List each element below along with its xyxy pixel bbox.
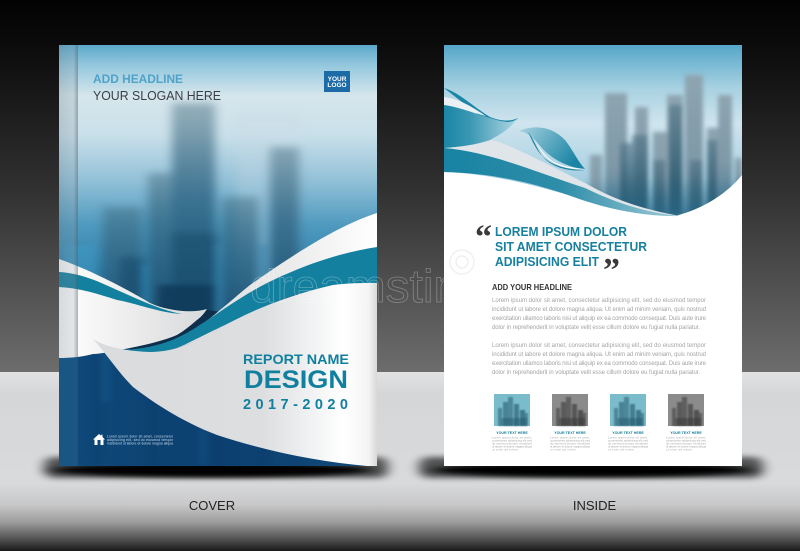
thumbnail 1: consectetur adipisicing elit sed — [492, 438, 532, 442]
report title: DESIGN — [244, 366, 348, 394]
paragraph 2: Lorem ipsum dolor sit amet, consectetur adipisicing elit, sed do eiusmod tempor — [492, 343, 706, 349]
paragraph 2 — [492, 343, 707, 376]
cover drop shadow — [44, 457, 388, 478]
panel: cover — [59, 45, 377, 466]
report title: 2017-2020 — [243, 397, 348, 413]
thumbnail 3: ut enim ad minim — [608, 448, 635, 452]
thumbnail 1 — [492, 394, 532, 452]
icon: house — [93, 434, 105, 445]
label: inside: INSIDE — [573, 498, 616, 513]
header skyline — [585, 75, 745, 223]
white wave, upper right — [122, 213, 377, 353]
thumbnail 2: ut labore et dolore magna aliqua — [550, 444, 590, 448]
header image — [444, 45, 745, 223]
cover sky background — [59, 45, 377, 312]
background floor — [0, 372, 800, 551]
headline: ADD YOUR HEADLINE — [492, 282, 572, 292]
paragraph 1: Lorem ipsum dolor sit amet, consectetur adipisicing elit, sed do eiusmod tempor — [492, 298, 706, 304]
paragraph 2: dolor in reprehenderit in voluptate velit esse cillum dolore eu fugiat nulla pariatur. — [492, 370, 700, 376]
background wall — [0, 0, 800, 373]
page background — [444, 45, 742, 466]
logo badge: LOGO — [327, 82, 347, 89]
pull quote: LOREM IPSUM DOLOR — [495, 225, 627, 239]
blurred city skyline — [103, 103, 300, 337]
thumbnail 1: YOUR TEXT HERE — [496, 431, 528, 435]
paragraph 1: incididunt ut labore et dolore magna aliqua. Ut enim ad minim veniam, quis nostrud — [492, 307, 706, 313]
quote marks: ” — [603, 252, 620, 289]
thumbnail 3: consectetur adipisicing elit sed — [608, 438, 648, 442]
thumbnail 4: consectetur adipisicing elit sed — [666, 438, 706, 442]
thumbnail 1: do eiusmod tempor incididunt — [492, 442, 532, 446]
paragraph 2: exercitation ullamco laboris nisi ut aliquip ex ea commodo consequat. Duis aute irure — [492, 361, 707, 367]
cover address text — [107, 434, 174, 446]
panel: inside page — [444, 45, 745, 466]
logo badge: YOUR — [328, 76, 347, 83]
teal wedge — [444, 105, 518, 148]
thumbnail 2: Lorem ipsum dolor sit amet, — [550, 436, 590, 440]
stock watermark: dreamstime — [250, 260, 500, 312]
cover address text: Lorem ipsum dolor sit amet, consectetur — [107, 434, 174, 438]
paragraph 1: dolor in reprehenderit in voluptate velit esse cillum dolore eu fugiat nulla pariatur. — [492, 325, 700, 331]
thumbnail 4: ut labore et dolore magna aliqua — [666, 444, 706, 448]
pull quote — [495, 225, 647, 269]
thumbnail 1: ut labore et dolore magna aliqua — [492, 444, 532, 448]
thumbnail 3: YOUR TEXT HERE — [612, 431, 644, 435]
spine over navy — [59, 358, 78, 466]
teal ribbon, right — [123, 247, 377, 353]
thumbnail 1: Lorem ipsum dolor sit amet, — [492, 436, 532, 440]
header sky — [444, 45, 742, 220]
pull quote: SIT AMET CONSECTETUR — [495, 240, 647, 254]
grey wave band — [444, 140, 680, 216]
paragraph 1 — [492, 298, 707, 331]
thumbnail 1: ut enim ad minim — [492, 448, 519, 452]
cover address text: adipisicing elit, sed do eiusmod tempor — [107, 438, 174, 442]
teal ribbon, left — [59, 272, 182, 314]
thumbnail 3: do eiusmod tempor incididunt — [608, 442, 648, 446]
pull quote: ADIPISICING ELIT — [495, 255, 599, 269]
leaf shape — [519, 127, 585, 170]
report title: REPORT NAME — [243, 351, 349, 367]
teal lower band — [444, 148, 680, 216]
dark sliver — [130, 310, 222, 350]
paragraph 2: incididunt ut labore et dolore magna aliqua. Ut enim ad minim veniam, quis nostrud — [492, 352, 706, 358]
slogan: YOUR SLOGAN HERE — [93, 88, 221, 103]
spine — [59, 45, 78, 466]
thumbnail 2: do eiusmod tempor incididunt — [550, 442, 590, 446]
white wave stripe — [444, 97, 486, 116]
thumbnail 4: do eiusmod tempor incididunt — [666, 442, 706, 446]
logo badge — [324, 71, 350, 92]
large white sweep — [93, 283, 377, 466]
quote marks: “ — [475, 219, 492, 256]
thumbnail 2 — [550, 394, 590, 452]
thumbnail 4 — [666, 394, 706, 452]
thumbnail 3: Lorem ipsum dolor sit amet, — [608, 436, 648, 440]
thumbnail 4: Lorem ipsum dolor sit amet, — [666, 436, 706, 440]
teal wave stripe — [444, 88, 518, 123]
thumbnail 2: consectetur adipisicing elit sed — [550, 438, 590, 442]
thumbnail 3 — [608, 394, 648, 452]
inside page drop shadow — [419, 457, 763, 478]
vertical light streaks — [66, 246, 268, 315]
navy panel stripes — [106, 356, 107, 398]
paragraph 1: exercitation ullamco laboris nisi ut aliquip ex ea commodo consequat. Duis aute irure — [492, 316, 707, 322]
report title — [244, 354, 348, 409]
thumbnail 3: ut labore et dolore magna aliqua — [608, 444, 648, 448]
thumbnail 2: YOUR TEXT HERE — [554, 431, 586, 435]
thumbnail 2: ut enim ad minim — [550, 448, 577, 452]
quote marks — [475, 219, 620, 289]
cover address text: incididunt ut labore et dolore magna aliqua — [107, 442, 173, 446]
white wave, lower left body — [59, 259, 207, 358]
thumbnail 4: YOUR TEXT HERE — [670, 431, 702, 435]
label: cover: COVER — [189, 498, 235, 513]
add headline: ADD HEADLINE — [93, 72, 183, 86]
navy lower panel — [59, 345, 377, 466]
thumbnail 4: ut enim ad minim — [666, 448, 693, 452]
